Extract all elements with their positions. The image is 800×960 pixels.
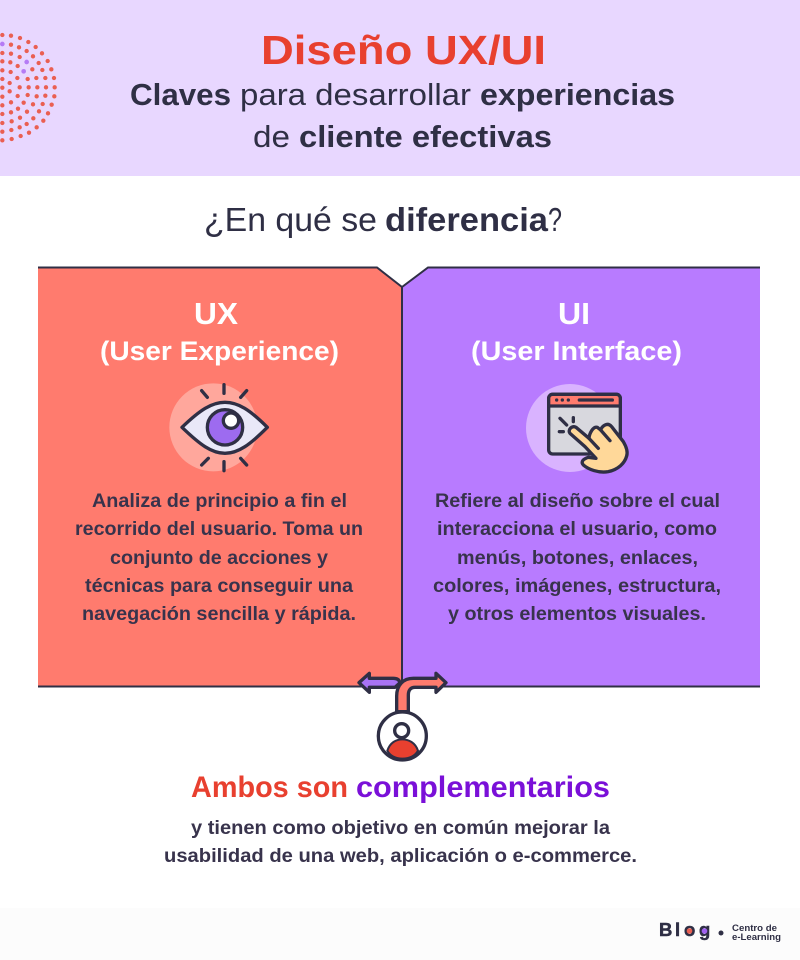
subtitle: cliente efectivas: [299, 119, 552, 154]
footer logo: Centro de: [732, 923, 777, 933]
UX description: navegación sencilla y rápida.: [82, 604, 356, 625]
header band: [0, 0, 800, 176]
UI heading: [471, 296, 682, 366]
closing text: [164, 818, 637, 867]
UX heading: UX: [194, 296, 238, 331]
UI description: [433, 491, 721, 625]
UI heading: (User Interface): [471, 336, 682, 366]
footer logo: [659, 919, 781, 942]
dot pattern: [0, 33, 57, 142]
UI description: y otros elementos visuales.: [448, 604, 706, 625]
subtitle: de: [253, 119, 290, 154]
closing text: y tienen como objetivo en común mejorar la: [191, 818, 610, 839]
section heading: [204, 201, 562, 238]
closing heading: [191, 771, 610, 804]
footer logo: e-Learning: [732, 932, 781, 942]
footer logo: Blog: [659, 919, 710, 940]
UI description: colores, imágenes, estructura,: [433, 576, 721, 597]
closing heading: Ambos son: [191, 771, 348, 804]
icon: person with diverging arrows: [359, 673, 446, 760]
footer band: [0, 908, 800, 960]
icon: eye: [169, 383, 267, 471]
UX description: conjunto de acciones y: [110, 548, 328, 569]
UX description: técnicas para conseguir una: [85, 576, 353, 597]
subtitle: Claves: [130, 77, 231, 112]
icon: browser window with hand: [526, 384, 627, 472]
UI heading: UI: [558, 296, 590, 331]
UI description: Refiere al diseño sobre el cual: [435, 491, 720, 512]
subtitle: experiencias: [480, 77, 675, 112]
panel: UX: [38, 268, 402, 686]
section heading: ?: [548, 201, 562, 238]
section heading: diferencia: [385, 201, 549, 238]
subtitle: para desarrollar: [240, 77, 471, 112]
panel: UI: [402, 268, 760, 686]
title: Diseño UX/UI: [261, 27, 546, 73]
section heading: ¿En qué se: [204, 201, 377, 238]
subtitle: [130, 77, 675, 154]
UX description: recorrido del usuario. Toma un: [75, 519, 363, 540]
closing heading: complementarios: [356, 771, 610, 804]
UI description: menús, botones, enlaces,: [457, 548, 698, 569]
UX heading: [100, 296, 339, 366]
UI description: interacciona el usuario, como: [437, 519, 717, 540]
closing text: usabilidad de una web, aplicación o e-commerce.: [164, 846, 637, 867]
UX description: [75, 491, 363, 625]
UX heading: (User Experience): [100, 336, 339, 366]
panel outlines: [38, 268, 760, 686]
UX description: Analiza de principio a fin el: [92, 491, 347, 512]
